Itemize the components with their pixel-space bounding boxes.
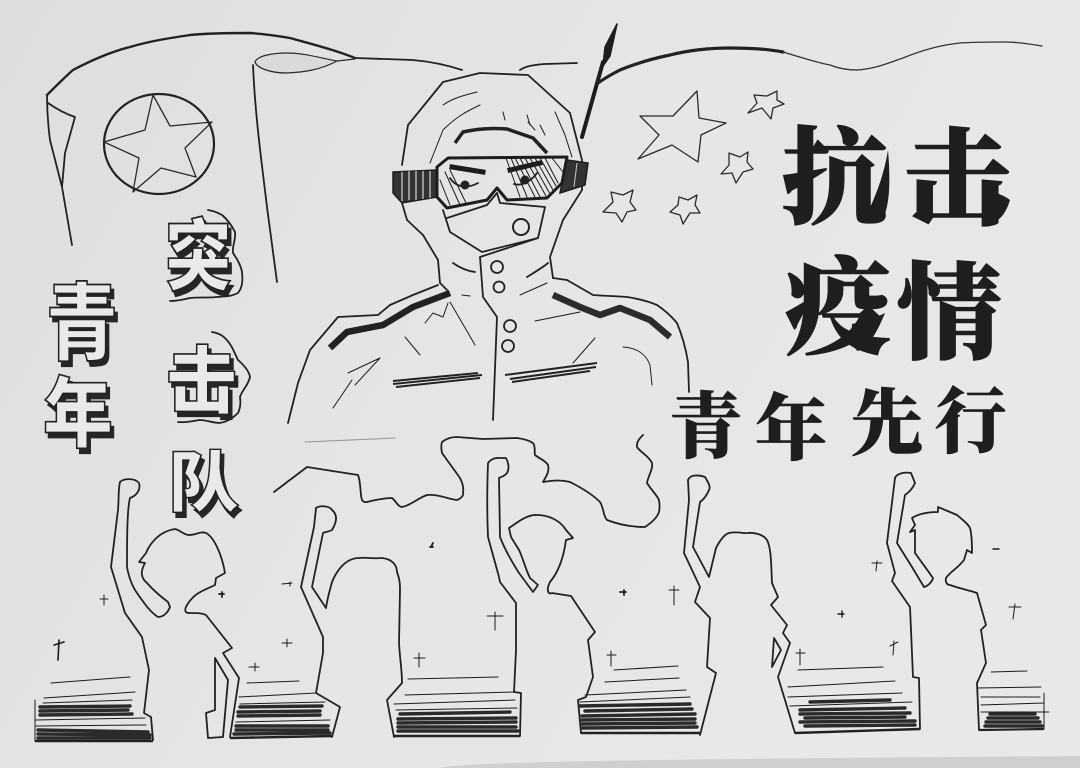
subtitle: 青年先行: 年 [755, 390, 827, 470]
left shoulder stripe [330, 293, 450, 348]
title: 抗击疫情 [782, 121, 1010, 373]
subtitle: 青年先行: 青 [670, 388, 742, 468]
eyebrows [452, 163, 540, 172]
subtitle: 青年先行: 先 [851, 385, 923, 465]
goggles strap left [393, 170, 437, 203]
flag left edge and fold [47, 95, 75, 245]
collar [453, 238, 548, 420]
goggles strap right [560, 160, 588, 193]
subtitle: 青年先行 [670, 383, 1007, 470]
mask valve [513, 219, 529, 235]
silhouette student 3 [487, 458, 595, 736]
medical worker figure [288, 73, 689, 442]
flag top edge [47, 33, 355, 95]
small star left [603, 190, 636, 222]
suit wrinkles [333, 283, 652, 408]
hair band [455, 128, 547, 153]
left flag with star emblem [47, 33, 355, 282]
wavy outline around 突 [170, 210, 242, 301]
flag curl [255, 53, 355, 73]
hatched ground block 2 [230, 681, 332, 738]
emblem circle [104, 94, 214, 194]
emblem star [104, 95, 212, 192]
vertical slogan: 突击队: 击 [166, 341, 237, 423]
vertical slogan: 青年: 年 [43, 371, 113, 458]
silhouette student 1 [111, 479, 239, 740]
vertical slogan: 突击队: 队 [168, 446, 239, 520]
hatched ground block 6 [977, 671, 1049, 730]
buttons [491, 261, 516, 352]
hatched ground block 3 [394, 677, 520, 736]
small star right [670, 195, 700, 224]
chest pockets [393, 363, 597, 387]
mask [443, 193, 545, 252]
eyes [450, 173, 537, 190]
silhouette student 5 [887, 473, 986, 730]
small star top [748, 91, 784, 119]
sparkle crosses [54, 543, 1021, 671]
vertical slogan: 青年 [43, 277, 118, 458]
subtitle: 青年先行: 行 [935, 383, 1007, 463]
spear pole [582, 62, 603, 137]
shoulders and arms [288, 278, 689, 423]
China map outline [274, 435, 660, 527]
hood outer [402, 73, 582, 278]
title: 抗击疫情: 抗 [782, 121, 887, 238]
small star mid [721, 152, 753, 183]
silhouette student 4 [684, 475, 795, 735]
title: 抗击疫情: 疫 [785, 251, 890, 368]
brush blobs on title strokes [852, 150, 1010, 351]
wavy outline around 击 [178, 332, 250, 423]
flag pole edge [253, 65, 277, 282]
top wave line segments [355, 58, 577, 70]
hood inner [430, 92, 572, 163]
hatched ground block 4 [580, 666, 700, 733]
five stars [603, 91, 784, 224]
vertical slogan: 青年: 青 [46, 277, 118, 371]
title: 抗击疫情: 击 [905, 122, 1010, 239]
title: 抗击疫情: 情 [897, 256, 1002, 373]
goggles frame [437, 157, 567, 208]
spear head [603, 24, 617, 66]
flag wave thin part [783, 42, 1042, 70]
vertical slogan: 突击队: 突 [165, 214, 232, 301]
hatched ground block 5 [788, 667, 920, 733]
hatched ground block 1 [35, 677, 153, 741]
faint line below suit [305, 438, 395, 442]
goggles glare hatching [440, 158, 563, 205]
big star [638, 91, 726, 162]
silhouette student 2 [301, 506, 402, 737]
flag wave thick part [598, 48, 783, 83]
right shoulder stripe [553, 295, 670, 337]
right flag with spear [582, 24, 1042, 137]
vertical slogan: 突击队 [165, 210, 250, 520]
